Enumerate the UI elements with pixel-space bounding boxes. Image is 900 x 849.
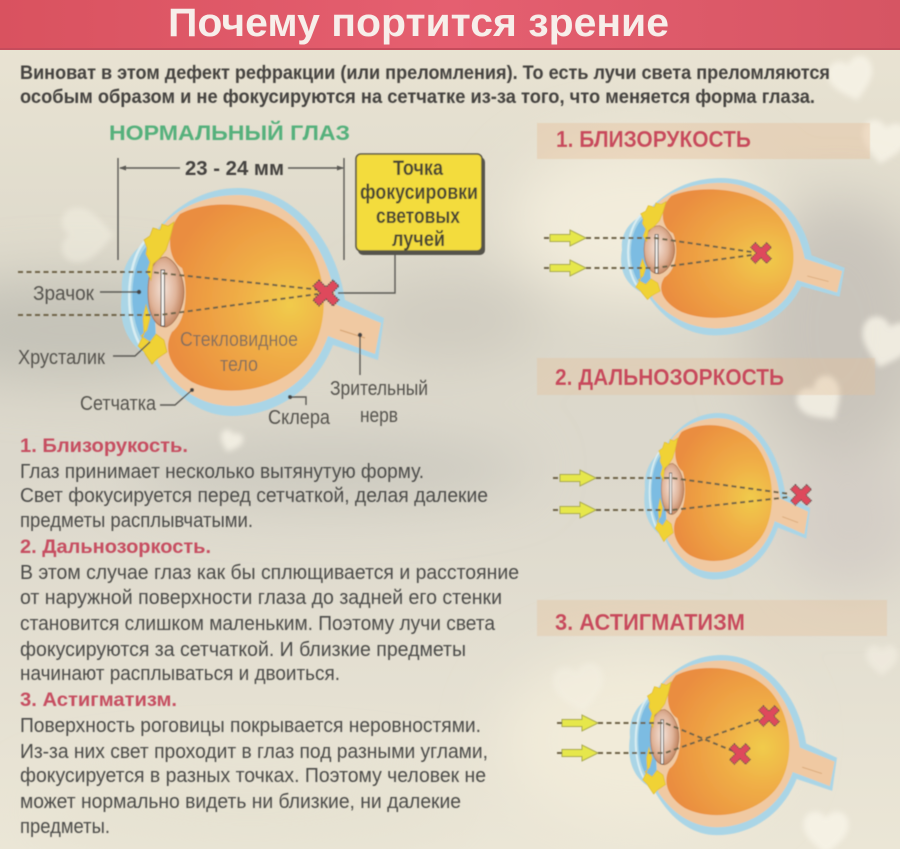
label: vitreous body: [180, 329, 298, 376]
text: astigmatism: [20, 690, 488, 838]
panel: hyperopia: [537, 358, 875, 579]
icon: focus cross: [313, 280, 339, 306]
text: astigmatism: предметы.: [20, 816, 110, 838]
callout: focus point: фокусировки: [360, 181, 478, 204]
label: lens: [18, 342, 150, 369]
text: hyperopia: 2. Дальнозоркость.: [20, 537, 211, 558]
heading: myopia: [537, 123, 870, 159]
icon: cross lower: [730, 744, 750, 764]
text: hyperopia: фокусируются за сетчаткой. И близкие предметы: [20, 639, 466, 661]
text block: descriptions: [20, 436, 519, 838]
dimension: 23-24 mm: 23 - 24 мм: [185, 158, 284, 180]
eye diagram: myopia: [621, 178, 845, 335]
rays: hyperopia: [553, 470, 790, 518]
heading: normal eye: НОРМАЛЬНЫЙ ГЛАЗ: [109, 120, 350, 145]
label: optic nerve: нерв: [360, 404, 398, 427]
text: astigmatism: Из-за них свет проходит в глаз под разными углами,: [20, 741, 488, 763]
dimension: 23-24 mm: [118, 158, 344, 260]
label: retina: Сетчатка: [80, 392, 157, 415]
text: astigmatism: Поверхность роговицы покрывается неровностями.: [20, 715, 481, 737]
callout: focus point: Точка: [393, 157, 443, 180]
eye diagram: hyperopia: [644, 413, 810, 579]
heading: astigmatism: [537, 600, 887, 636]
panel: astigmatism: [537, 600, 887, 835]
text: myopia: 1. Близорукость.: [20, 436, 188, 457]
intro text: [20, 62, 830, 108]
rays: astigmatism: [557, 715, 760, 761]
label: sclera: Склера: [268, 406, 331, 429]
text: myopia: Свет фокусируется перед сетчаткой, делая далекие: [20, 485, 488, 507]
panel: normal eye: [18, 120, 485, 429]
label: retina: [80, 388, 194, 415]
text: hyperopia: начинают расплываться и двоиться.: [20, 663, 340, 685]
text: astigmatism: фокусируется в разных точках. Поэтому человек не: [20, 765, 486, 787]
heading: hyperopia: [537, 358, 875, 395]
label: sclera: [268, 395, 331, 429]
label: optic nerve: Зрительный: [330, 377, 428, 400]
text: myopia: Глаз принимает несколько вытянутую форму.: [20, 461, 424, 483]
heading: astigmatism: 3. АСТИГМАТИЗМ: [555, 609, 745, 635]
eye diagram: astigmatism: [629, 655, 837, 835]
text: astigmatism: может нормально видеть ни близкие, ни далекие: [20, 791, 461, 813]
light rays: [18, 272, 322, 315]
text: hyperopia: становится слишком маленьким. Поэтому лучи света: [20, 613, 496, 635]
label: vitreous body: Стекловидное: [180, 329, 298, 351]
intro text: Виноват в этом дефект рефракции (или преломления). То есть лучи света преломляются: [20, 62, 830, 84]
rays: myopia: [544, 230, 752, 276]
icon: cross hyperopia: [791, 485, 811, 505]
header band: [0, 0, 900, 50]
text: astigmatism: 3. Астигматизм.: [20, 690, 177, 711]
intro text: особым образом и не фокусируются на сетчатке из-за того, что меняется форма глаза.: [20, 86, 815, 108]
callout: focus point: световых: [376, 205, 460, 228]
text: hyperopia: В этом случае глаз как бы сплющивается и расстояние: [20, 562, 519, 584]
text: myopia: [20, 436, 488, 532]
callout: focus point: лучей: [392, 228, 445, 251]
panel: myopia: [537, 123, 870, 335]
text: hyperopia: [20, 537, 519, 685]
title: Почему портится зрение: [168, 1, 669, 45]
heading: hyperopia: 2. ДАЛЬНОЗОРКОСТЬ: [555, 364, 784, 390]
label: vitreous body: тело: [220, 354, 258, 376]
icon: cross upper: [759, 706, 779, 726]
heading: myopia: 1. БЛИЗОРУКОСТЬ: [556, 126, 751, 152]
label: pupil: Зрачок: [33, 282, 95, 305]
text: myopia: предметы расплывчатыми.: [20, 510, 253, 532]
label: lens: Хрусталик: [18, 346, 106, 369]
text: hyperopia: от наружной поверхности глаза до задней его стенки: [20, 587, 502, 609]
callout: focus point: [338, 154, 485, 293]
label: pupil: [33, 282, 141, 305]
label: optic nerve: [330, 333, 428, 427]
icon: cross myopia: [751, 243, 771, 263]
eye diagram: [121, 188, 384, 416]
